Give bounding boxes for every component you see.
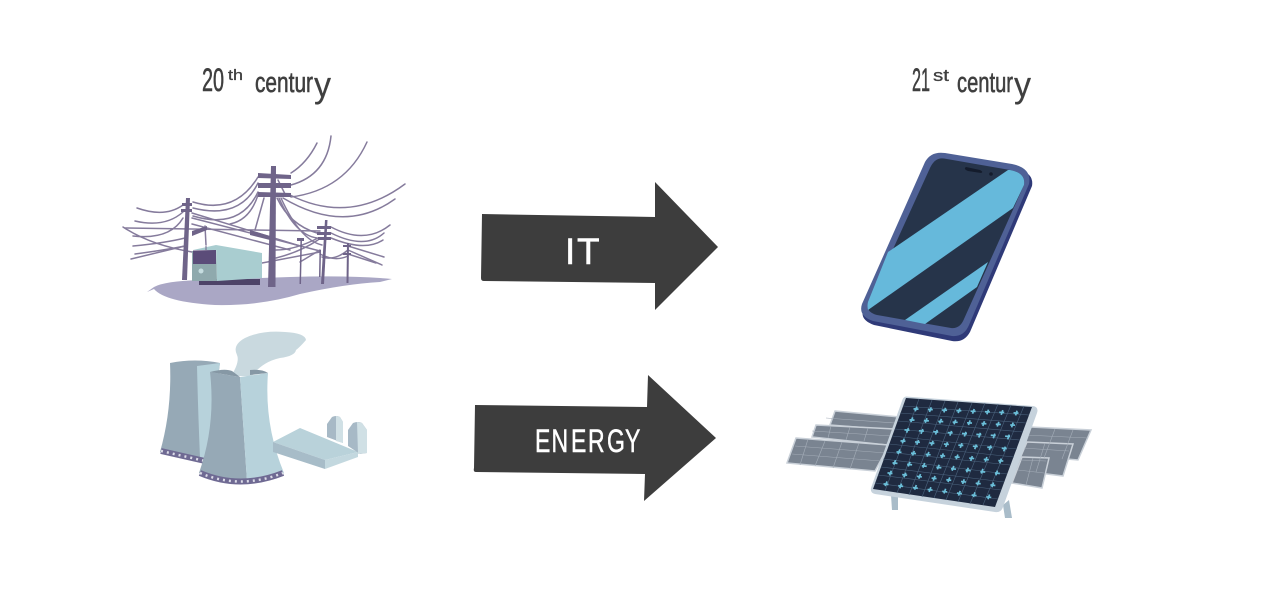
tram xyxy=(192,245,262,285)
arrow label: IT: IT xyxy=(565,231,600,272)
chimneys xyxy=(327,416,343,443)
notch xyxy=(965,167,982,173)
wires xyxy=(123,136,405,265)
illustration: power lines and tram xyxy=(123,136,405,305)
heading: 21st century: centur xyxy=(957,67,1013,99)
screen stripes xyxy=(868,170,1024,310)
arrow: IT xyxy=(481,182,718,310)
cell highlights xyxy=(884,407,1018,500)
front cooling tower xyxy=(199,372,247,481)
screen xyxy=(868,158,1024,328)
main panel frame xyxy=(871,396,1038,512)
heading: 20th century xyxy=(202,62,331,105)
illustration: solar panels xyxy=(787,396,1091,518)
phone frame xyxy=(861,153,1029,336)
heading: 20th century: th xyxy=(228,67,243,84)
heading: 20th century: 20 xyxy=(202,62,224,98)
main panel cells xyxy=(873,398,1032,507)
heading: 20th century: y xyxy=(314,64,331,105)
illustration: cooling towers and plant xyxy=(160,332,367,482)
ground xyxy=(147,276,392,305)
low building xyxy=(273,428,358,460)
back cooling tower xyxy=(160,360,220,462)
panel legs xyxy=(891,495,1012,518)
illustration: smartphone xyxy=(861,153,1032,341)
heading: 21st century: y xyxy=(1014,64,1031,105)
background panel grid xyxy=(792,418,1088,485)
heading: 21st century: 21 xyxy=(912,62,930,98)
arrow label: ENERGY: ENERGY xyxy=(535,423,640,459)
smoke plume xyxy=(231,332,306,376)
arrow: ENERGY xyxy=(474,375,716,501)
phone back shadow xyxy=(862,170,1032,341)
background panels xyxy=(787,411,1091,488)
poles xyxy=(181,166,351,287)
heading: 21st century: st xyxy=(933,66,949,85)
heading: 20th century: centur xyxy=(255,67,313,99)
cell grid xyxy=(875,399,1029,505)
heading: 21st century xyxy=(912,62,1031,105)
